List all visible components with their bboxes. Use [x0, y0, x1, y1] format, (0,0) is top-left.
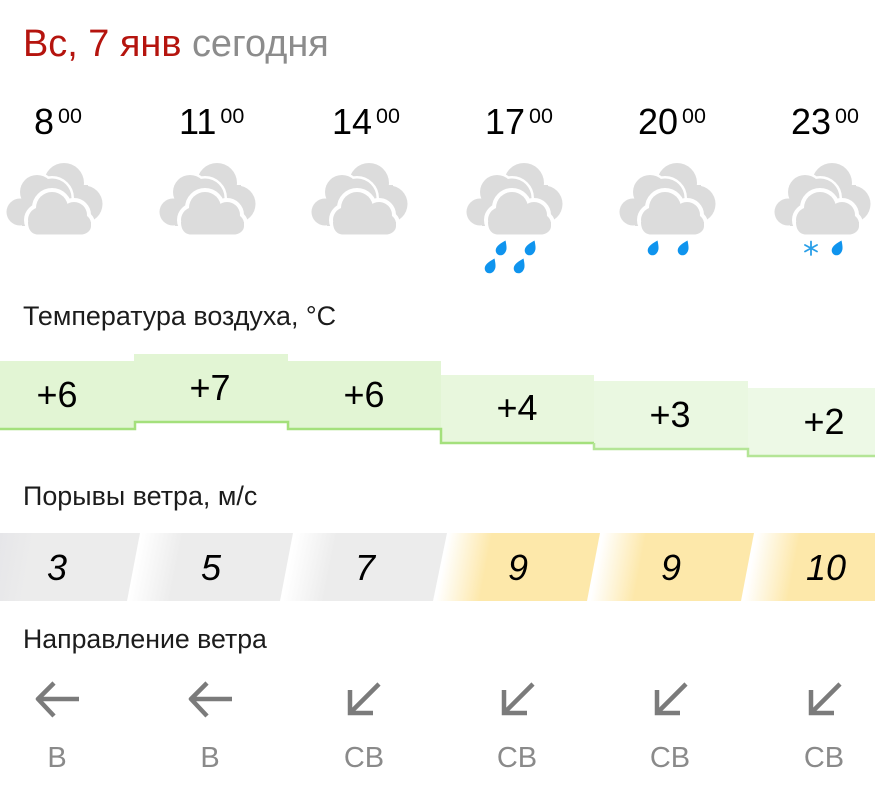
temperature chart: +4 — [496, 387, 538, 428]
wind gusts band: 7 — [355, 547, 377, 588]
icon: rain 20:00 — [620, 163, 716, 255]
arrow: north-east wind — [350, 684, 379, 713]
wind direction labels: СВ — [344, 742, 384, 774]
weather icons — [6, 163, 870, 273]
wind gusts band: 10 — [806, 547, 846, 588]
icon: cloudy 11:00 — [160, 163, 256, 244]
temperature chart: +2 — [803, 401, 845, 442]
hour labels: 00 — [682, 104, 706, 128]
hour labels: 00 — [835, 104, 859, 128]
hour labels: 17 — [485, 101, 525, 142]
wind gusts band: 9 — [508, 547, 528, 588]
temperature chart: +6 — [36, 374, 78, 415]
wind direction labels — [47, 742, 844, 774]
hour labels: 8 — [34, 101, 54, 142]
temperature chart: +7 — [189, 367, 231, 408]
icon: cloudy 14:00 — [312, 163, 408, 244]
hour labels — [34, 101, 859, 142]
icon: sleet 23:00 — [774, 163, 870, 255]
wind gusts band — [0, 533, 875, 601]
hour labels: 20 — [638, 101, 678, 142]
wind direction labels: СВ — [497, 742, 537, 774]
icon: cloudy 8:00 — [6, 163, 102, 244]
hour labels: 00 — [220, 104, 244, 128]
hour labels: 00 — [58, 104, 82, 128]
hour labels: 14 — [332, 101, 372, 142]
arrow: east wind — [38, 683, 79, 716]
heading: wind direction: Направление ветра — [23, 624, 267, 654]
arrow: east wind — [191, 683, 232, 716]
heading: wind gusts: Порывы ветра, м/с — [23, 481, 257, 511]
wind direction labels: СВ — [804, 742, 844, 774]
arrow: north-east wind — [657, 684, 686, 713]
temperature chart — [0, 354, 875, 456]
wind gusts band: 9 — [661, 547, 681, 588]
temperature chart: +6 — [343, 374, 385, 415]
wind direction labels: СВ — [650, 742, 690, 774]
wind direction labels: В — [47, 742, 67, 774]
temperature chart: +3 — [649, 394, 691, 435]
wind gusts band: 5 — [201, 547, 222, 588]
hour labels: 00 — [529, 104, 553, 128]
hour labels: 23 — [791, 101, 831, 142]
arrow: north-east wind — [811, 684, 840, 713]
wind direction arrows — [38, 683, 840, 716]
wind gusts band: 3 — [47, 547, 67, 588]
wind direction labels: В — [200, 742, 220, 774]
arrow: north-east wind — [504, 684, 533, 713]
heading: air temperature: Температура воздуха, °C — [23, 301, 336, 331]
title: Вс, 7 янв сегодня — [23, 23, 329, 65]
icon: heavy rain 17:00 — [466, 163, 562, 273]
hour labels: 11 — [179, 101, 216, 142]
hour labels: 00 — [376, 104, 400, 128]
